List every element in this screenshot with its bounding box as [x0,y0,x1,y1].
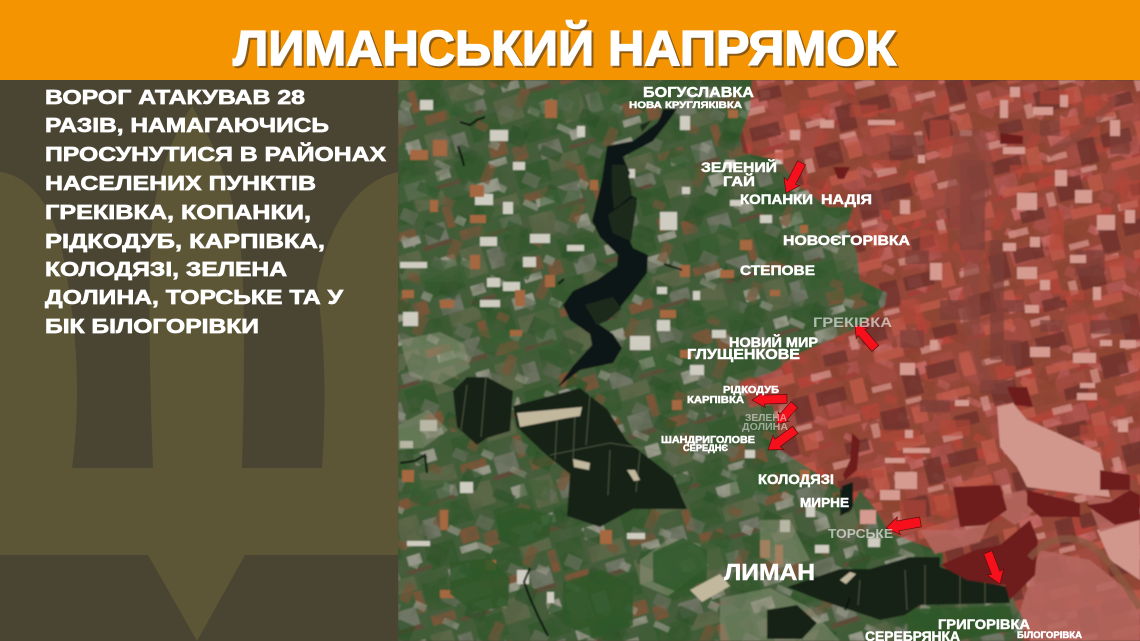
panel text block: РІДКОДУБ, КАРПІВКА, [45,230,325,253]
place labels: КАРПІВКА [687,395,744,406]
place labels: НОВА КРУГЛЯКІВКА [629,100,742,111]
left panel background [0,80,398,641]
panel text block: НАСЕЛЕНИХ ПУНКТІВ [45,172,316,195]
red zone: field details [790,87,1140,530]
panel text block: РАЗІВ, НАМАГАЮЧИСЬ [45,114,329,137]
place labels: ДОЛИНА [742,422,788,433]
panel text block: ПРОСУНУТИСЯ В РАЙОНАХ [45,142,386,166]
red zone: pale southern fields [920,490,1140,641]
arrow: Білогорівка [979,549,1008,587]
title: ЛИМАНСЬКИЙ НАПРЯМОК [235,23,898,78]
place labels: ШАНДРИГОЛОВЕ [661,435,755,446]
place labels: ЗЕЛЕНИЙ [701,158,777,175]
place labels: ЗЕЛЕНА [745,413,787,424]
map: satellite terrain [398,80,1140,641]
map: dark wooded islands in reservoir [585,120,652,325]
arrow: Греківка [849,320,881,354]
map: forest firebreaks [461,377,985,610]
panel text block: ВОРОГ АТАКУВАВ 28 [45,86,305,109]
place labels: НОВОЄГОРІВКА [783,232,910,248]
place labels: ГРЕКІВКА [813,314,892,330]
trident emblem watermark [0,106,398,641]
header bar [0,0,1140,80]
map: sand patches in forest [517,407,856,602]
title: ЛИМАНСЬКИЙ НАПРЯМОК [233,21,896,76]
panel text block [45,86,386,338]
map: streams [400,117,850,636]
place labels: ТОРСЬКЕ [828,526,893,541]
panel text block: ГРЕКІВКА, КОПАНКИ, [45,201,311,224]
map: bright green woodland [450,507,1016,641]
red zone: central settlement corridor [944,95,1120,390]
panel text block: БІК БІЛОГОРІВКИ [45,315,259,338]
map: reservoir and river [557,109,677,388]
place labels: ГЛУЩЕНКОВЕ [687,346,800,363]
arrow: Торське [884,513,922,537]
place labels: БОГУСЛАВКА [643,85,755,101]
map: urban and sandy strips [398,332,840,641]
arrow: Рідкодуб [752,391,787,408]
place labels: СЕРЕДНЄ [683,443,729,453]
map: dark forest [453,377,1010,639]
panel text block: ДОЛИНА, ТОРСЬКЕ ТА У [45,286,343,309]
place labels: СТЕПОВЕ [740,262,815,278]
place labels: ГАЙ [723,172,755,189]
place labels: НОВИЙ МИР [729,333,818,350]
red zone: dark forest patches [833,133,1140,600]
arrow: Зелена Долина [772,400,800,429]
red zone: river valley [1030,539,1140,608]
place labels: МИРНЕ [800,495,849,510]
panel text block: КОЛОДЯЗІ, ЗЕЛЕНА [45,258,287,281]
place labels: БІЛОГОРІВКА [1017,630,1082,641]
place labels: КОЛОДЯЗІ [758,471,834,487]
red zone: field mottling [740,80,1140,641]
place labels: НАДІЯ [821,191,872,207]
arrow: Копанки [778,159,810,197]
attack arrows [752,159,1008,587]
place labels [629,85,1082,641]
place labels: ГРИГОРІВКА [938,616,1030,632]
red zone: pale sand plain [997,403,1140,580]
red occupied zone overlay [740,80,1140,641]
place labels: КОПАНКИ [740,191,813,207]
arrow: Колодязі [763,423,801,457]
place labels: РІДКОДУБ [723,385,779,396]
place labels: ЛИМАН [724,559,815,585]
